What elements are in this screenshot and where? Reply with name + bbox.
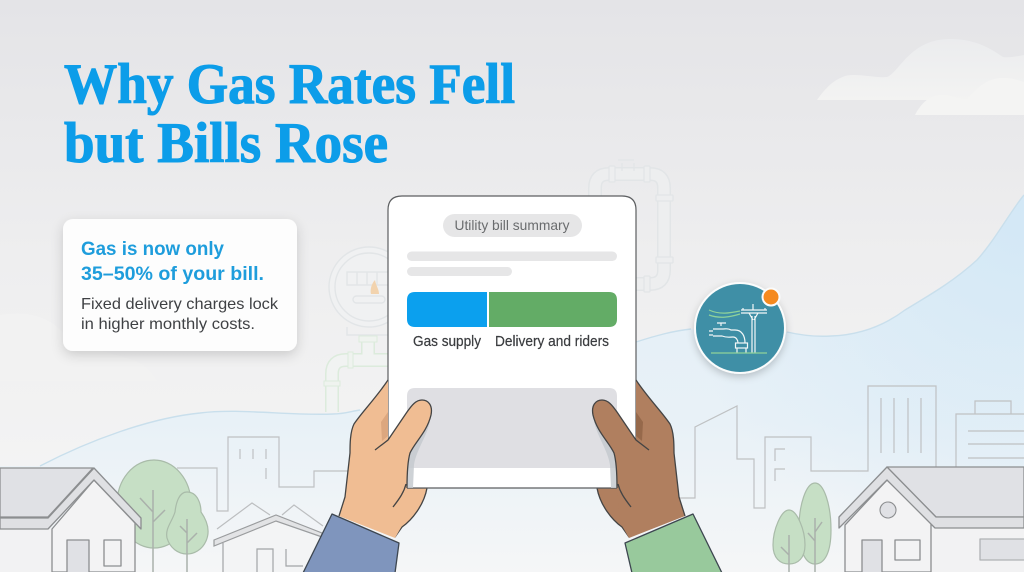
placeholder lines xyxy=(407,252,617,276)
grey bill panel xyxy=(407,388,617,468)
faded pipe top right xyxy=(595,160,673,292)
cloud: top right large xyxy=(817,39,1024,100)
callout xyxy=(63,219,297,351)
faded green pipe xyxy=(324,336,392,412)
bar label: gas supply: Gas supply xyxy=(413,334,482,350)
faded flame xyxy=(371,280,379,294)
house: centre small xyxy=(214,503,323,572)
thumb shadows xyxy=(405,420,619,488)
tree: left small xyxy=(167,492,208,572)
cloud: left xyxy=(0,314,157,381)
tree: left large xyxy=(117,460,191,572)
left hand xyxy=(339,380,431,538)
callout headline xyxy=(81,239,264,285)
bill heading pill: Utility bill summary xyxy=(454,217,570,233)
left sleeve xyxy=(303,514,399,572)
skyline: left xyxy=(177,437,350,511)
bill heading pill xyxy=(443,214,582,237)
utility pole xyxy=(741,304,767,353)
icon badge: gas pipe and utility pole xyxy=(694,282,786,374)
title xyxy=(64,53,515,175)
faded gas meter xyxy=(329,247,409,335)
utility bill card xyxy=(388,196,636,488)
title: but Bills Rose xyxy=(64,112,388,175)
house: right xyxy=(839,467,1024,572)
tree: right pair xyxy=(773,483,831,572)
stacked bar xyxy=(407,292,617,327)
right hand xyxy=(593,380,685,538)
gas pipe xyxy=(709,323,748,353)
callout body: in higher monthly costs. xyxy=(81,316,255,333)
skyline: right xyxy=(679,386,1024,508)
callout body xyxy=(81,296,279,333)
right sleeve xyxy=(625,514,722,572)
hill tint on the right xyxy=(636,195,1024,572)
callout headline: Gas is now only xyxy=(81,239,224,260)
house: left xyxy=(0,468,141,572)
wires and ground xyxy=(709,310,767,353)
hill outline xyxy=(40,195,1024,466)
title: Why Gas Rates Fell xyxy=(64,53,515,116)
callout body: Fixed delivery charges lock xyxy=(81,296,279,313)
blue hill xyxy=(0,195,1024,572)
cloud: top right small xyxy=(915,78,1024,115)
notification dot xyxy=(762,288,780,306)
callout headline: 35–50% of your bill. xyxy=(81,264,264,285)
bar label: delivery and riders: Delivery and riders xyxy=(495,334,609,350)
hands behind bill xyxy=(392,488,632,537)
